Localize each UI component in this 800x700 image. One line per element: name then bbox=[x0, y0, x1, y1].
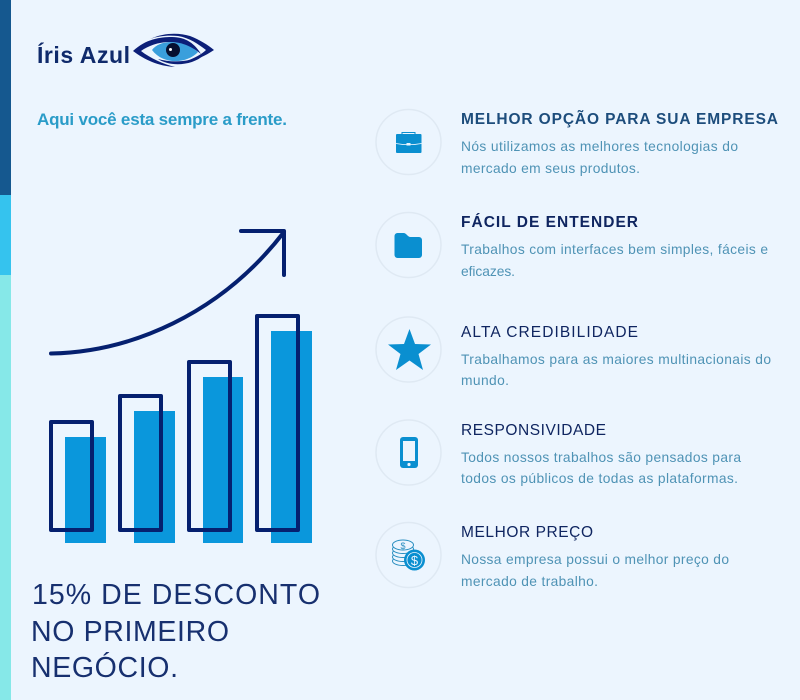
description: mundo. bbox=[461, 373, 509, 388]
item: responsividade bbox=[376, 420, 741, 486]
outlined bars bbox=[51, 316, 298, 530]
description: Nós utilizamos as melhores tecnologias do bbox=[461, 139, 738, 154]
discount heading: 15% DE DESCONTO bbox=[32, 579, 320, 611]
description: Nossa empresa possui o melhor preço do bbox=[461, 552, 729, 567]
logo bbox=[37, 34, 214, 68]
description: eficazes. bbox=[461, 264, 515, 279]
heading: MELHOR OPÇÃO PARA SUA EMPRESA bbox=[461, 110, 778, 128]
description bbox=[461, 552, 729, 589]
description bbox=[461, 242, 768, 279]
icon: star bbox=[376, 317, 441, 382]
icon: coins: $ bbox=[411, 553, 419, 568]
item: alta credibilidade bbox=[376, 317, 771, 388]
icon: coins bbox=[376, 522, 441, 588]
icon: coins: $ bbox=[400, 541, 406, 551]
description: todos os públicos de todas as plataformas. bbox=[461, 471, 738, 486]
filled bars bbox=[65, 331, 312, 543]
bar chart with growth arrow bbox=[51, 231, 312, 543]
sidebar colour stripe bbox=[0, 0, 11, 700]
discount heading: NEGÓCIO. bbox=[31, 652, 178, 684]
description: Trabalhamos para as maiores multinacionais do bbox=[461, 352, 771, 367]
description bbox=[461, 450, 741, 486]
description: mercado em seus produtos. bbox=[461, 161, 640, 176]
description: Trabalhos com interfaces bem simples, fáceis e bbox=[461, 242, 768, 257]
description bbox=[461, 352, 771, 388]
heading: RESPONSIVIDADE bbox=[461, 422, 606, 439]
brand name: Íris Azul bbox=[37, 41, 130, 68]
growth arrow bbox=[51, 231, 284, 354]
discount heading bbox=[31, 579, 320, 684]
heading: FÁCIL DE ENTENDER bbox=[461, 214, 638, 231]
heading: MELHOR PREÇO bbox=[461, 524, 593, 541]
discount heading: NO PRIMEIRO bbox=[31, 616, 229, 648]
item: melhor preço bbox=[376, 522, 729, 589]
heading: ALTA CREDIBILIDADE bbox=[461, 324, 638, 341]
item: fácil de entender bbox=[376, 212, 768, 279]
icon: briefcase bbox=[376, 110, 441, 174]
tagline: Aqui você esta sempre a frente. bbox=[37, 110, 287, 129]
icon: smartphone bbox=[376, 420, 441, 485]
item: melhor opção bbox=[376, 110, 778, 176]
description bbox=[461, 139, 738, 176]
description: mercado de trabalho. bbox=[461, 574, 598, 589]
description: Todos nossos trabalhos são pensados para bbox=[461, 450, 741, 465]
icon: folder bbox=[376, 212, 441, 278]
icon: eye bbox=[133, 34, 214, 67]
